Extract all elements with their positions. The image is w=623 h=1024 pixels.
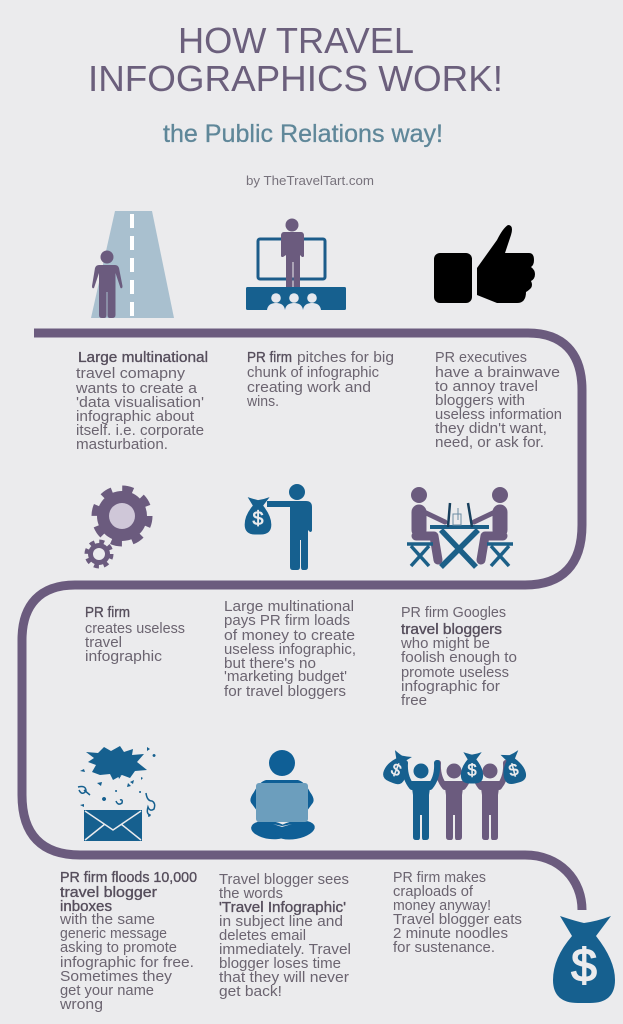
text block: step 8: get back!	[219, 984, 282, 1000]
winding path ribbon	[22, 333, 582, 910]
text block: step 9: Travel blogger eats	[393, 912, 522, 928]
text block: step 2: chunk of infographic	[247, 365, 379, 381]
text block: step 2: pitches for big	[297, 350, 394, 366]
icon: large money bag: $	[571, 939, 597, 991]
text block: step 1: travel comapny	[76, 366, 186, 382]
text block: step 5: Large multinational	[224, 599, 354, 615]
text block: step 5	[224, 599, 356, 700]
text block: step 3: they didn't want,	[435, 421, 547, 437]
text block: step 3: have a brainwave	[435, 365, 560, 381]
text block: step 5: useless infographic,	[224, 642, 356, 658]
icon: three people with money bags: $	[507, 760, 520, 780]
text block: step 3: PR executives	[435, 350, 527, 366]
text block: step 7: Sometimes they	[60, 969, 173, 985]
text block: step 2: PR firm	[247, 350, 292, 366]
icon: man holding money bag	[245, 484, 312, 570]
text block: step 1: Large multinational	[78, 350, 208, 366]
text block: step 2	[246, 350, 394, 410]
text block: step 6: PR firm Googles	[401, 605, 506, 621]
icon: blogger with laptop	[250, 750, 316, 842]
text block: step 1: 'data visualisation'	[76, 395, 204, 411]
icon: gears	[86, 488, 150, 566]
subtitle: the Public Relations way!	[163, 120, 443, 148]
icon: large money bag	[553, 916, 615, 1003]
text block: step 7: generic message	[60, 926, 167, 942]
text block: step 6: infographic for	[401, 679, 500, 695]
text block: step 7: inboxes	[60, 899, 112, 915]
text block: step 5: of money to create	[224, 628, 355, 644]
icon: two people at table	[407, 487, 513, 567]
icon: email burst	[78, 746, 156, 841]
icon: man holding money bag: $	[253, 508, 263, 530]
text block: step 4: creates useless	[85, 621, 185, 637]
text block: step 6: foolish enough to	[401, 650, 517, 666]
text block: step 4: infographic	[85, 649, 162, 665]
text block: step 1: wants to create a	[75, 381, 198, 397]
icon: presenter on stage	[246, 218, 346, 310]
icon: three people with money bags	[381, 749, 528, 840]
text block: step 4	[85, 605, 185, 665]
text block: step 7	[59, 870, 197, 1013]
icon: three people with money bags: $	[467, 761, 477, 780]
text block: step 6: free	[401, 693, 427, 709]
text block: step 4: travel	[85, 635, 122, 651]
text block: step 4: PR firm	[85, 605, 130, 621]
text block: step 7: travel blogger	[60, 885, 157, 901]
title: HOW TRAVEL	[178, 20, 414, 61]
text block: step 3	[435, 350, 562, 451]
text block: step 7: with the same	[59, 912, 155, 928]
text block: step 9: 2 minute noodles	[393, 926, 508, 942]
icon: person on road	[91, 211, 174, 318]
text block: step 7: get your name	[60, 983, 154, 999]
text block: step 3: to annoy travel	[435, 379, 538, 395]
byline: by TheTravelTart.com	[246, 173, 374, 188]
text block: step 6	[400, 605, 517, 709]
text block: step 7: infographic for free.	[60, 955, 194, 971]
icon: three people with money bags: $	[388, 759, 404, 780]
text block: step 3: useless information	[435, 407, 562, 423]
text block: step 8: deletes email	[219, 928, 306, 944]
text block: step 1	[75, 350, 208, 453]
text block: step 7: wrong	[59, 997, 103, 1013]
text block: step 3: need, or ask for.	[435, 435, 544, 451]
text block: step 8: 'Travel Infographic'	[219, 900, 346, 916]
text block: step 9: money anyway!	[393, 898, 491, 914]
text block: step 9	[393, 870, 522, 956]
text block: step 1: masturbation.	[76, 437, 168, 453]
text block: step 2: wins.	[246, 394, 279, 410]
text block: step 7: PR firm floods 10,000	[60, 870, 197, 886]
text block: step 5: pays PR firm loads	[224, 613, 350, 629]
text block: step 8: immediately. Travel	[219, 942, 351, 958]
text block: step 6: travel bloggers	[401, 622, 502, 638]
text block: step 5: for travel bloggers	[224, 684, 346, 700]
text block: step 8: Travel blogger sees	[219, 872, 349, 888]
text block: step 3: bloggers with	[435, 393, 525, 409]
text block: step 9: PR firm makes	[393, 870, 486, 886]
text block: step 7: asking to promote	[60, 940, 177, 956]
text block: step 5: but there's no	[224, 656, 316, 672]
text block: step 8: in subject line and	[219, 914, 343, 930]
text block: step 1: infographic about	[76, 409, 194, 425]
text block: step 8: blogger loses time	[219, 956, 341, 972]
text block: step 6: who might be	[400, 636, 490, 652]
text block: step 6: promote useless	[401, 665, 509, 681]
title	[88, 20, 503, 99]
text block: step 5: 'marketing budget'	[224, 669, 347, 685]
title: INFOGRAPHICS WORK!	[88, 58, 503, 99]
text block: step 2: creating work and	[247, 380, 371, 396]
text block: step 1: itself. i.e. corporate	[76, 423, 204, 439]
icon: thumbs up	[434, 225, 535, 303]
text block: step 9: for sustenance.	[393, 940, 495, 956]
text block: step 8: that they will never	[219, 970, 349, 986]
text block: step 8	[219, 872, 351, 1000]
text block: step 9: craploads of	[393, 884, 474, 900]
text block: step 8: the words	[219, 886, 283, 902]
